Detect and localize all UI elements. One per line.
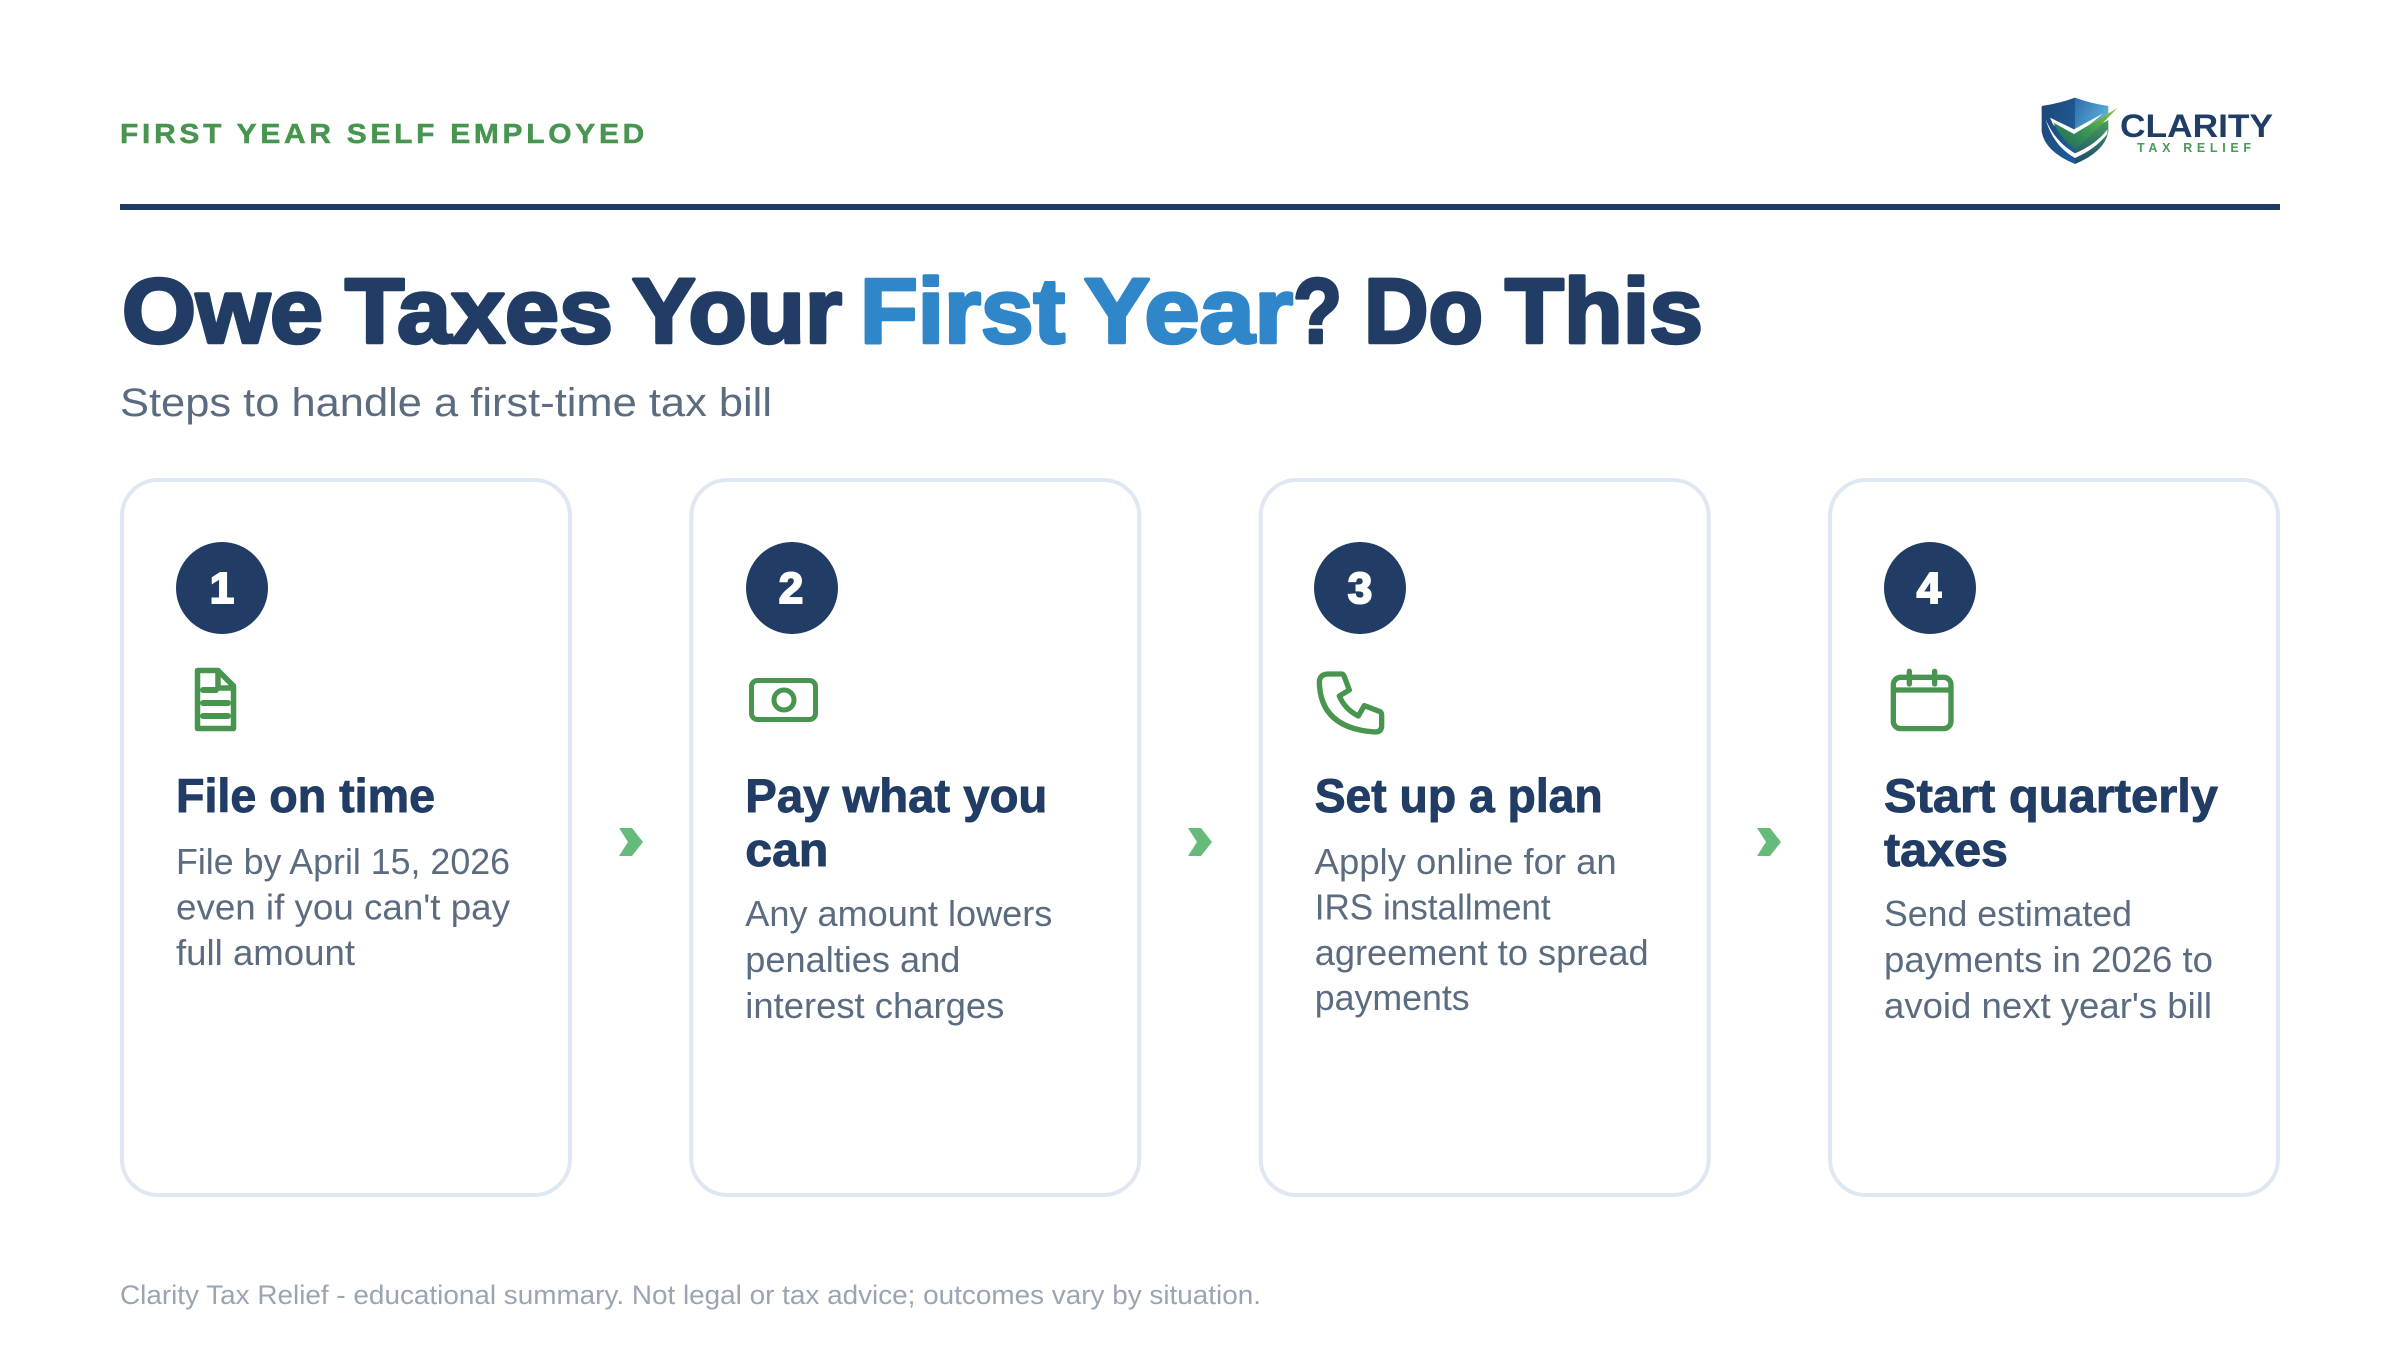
title xyxy=(122,260,1703,362)
title: Owe xyxy=(122,260,323,362)
step text: avoid next year's bill xyxy=(1884,985,2212,1026)
step heading: can xyxy=(745,823,828,876)
step text: IRS installment xyxy=(1315,886,1551,928)
step number 1: 1 xyxy=(210,564,234,613)
panel: step 4 xyxy=(1830,480,2278,1195)
step text: Send estimated xyxy=(1884,893,2132,934)
step text xyxy=(176,841,510,973)
step text: File by April 15, 2026 xyxy=(176,841,510,882)
step heading xyxy=(1884,769,2218,876)
step heading: File on time xyxy=(176,769,435,822)
step number 4 xyxy=(1884,542,1976,634)
logo: Clarity Tax Relief xyxy=(2042,98,2273,164)
step text: Apply online for an xyxy=(1315,841,1617,882)
step number 2 xyxy=(746,542,838,634)
icon: phone xyxy=(1319,674,1382,732)
step text xyxy=(745,893,1052,1026)
eyebrow label: FIRST YEAR SELF EMPLOYED xyxy=(120,118,648,149)
step number 3 xyxy=(1314,542,1406,634)
title: Taxes xyxy=(345,260,613,362)
step heading: Start quarterly xyxy=(1884,769,2218,822)
icon: banknote xyxy=(752,680,816,720)
title: Do xyxy=(1364,260,1483,362)
footer disclaimer: Clarity Tax Relief - educational summary. Not legal or tax advice; outcomes vary by situation. xyxy=(120,1280,1261,1310)
icon: shield with check xyxy=(2042,98,2117,164)
title: First xyxy=(860,260,1065,362)
header rule xyxy=(120,204,2280,210)
step text: Any amount lowers xyxy=(745,893,1052,934)
step heading: taxes xyxy=(1884,823,2008,876)
panel: step 1 xyxy=(122,480,570,1195)
step text: even if you can't pay xyxy=(176,886,510,928)
step text: interest charges xyxy=(745,985,1004,1026)
step text xyxy=(1315,841,1649,1018)
title: Year xyxy=(1084,260,1293,362)
logo tagline: TAX RELIEF xyxy=(2137,141,2251,155)
step number 2: 2 xyxy=(779,564,803,613)
step text: payments in 2026 to xyxy=(1884,939,2213,980)
subtitle: Steps to handle a first-time tax bill xyxy=(120,381,772,425)
icon: document xyxy=(198,670,234,728)
step text: full amount xyxy=(176,932,355,973)
panel: step 2 xyxy=(691,480,1139,1195)
step text xyxy=(1884,893,2213,1026)
arrow 1 xyxy=(619,828,643,856)
arrow 2 xyxy=(1188,828,1212,856)
logo wordmark: CLARITY xyxy=(2120,108,2273,144)
step heading: Pay what you xyxy=(745,769,1047,822)
step heading xyxy=(745,769,1047,876)
icon: calendar xyxy=(1893,671,1951,729)
step number 3: 3 xyxy=(1348,564,1372,613)
step text: agreement to spread xyxy=(1315,932,1649,973)
title: This xyxy=(1505,260,1703,362)
title: ? xyxy=(1293,260,1342,362)
step number 1 xyxy=(176,542,268,634)
step heading: Set up a plan xyxy=(1315,769,1603,822)
step number 4: 4 xyxy=(1917,564,1942,613)
step text: penalties and xyxy=(745,939,960,980)
step text: payments xyxy=(1315,977,1470,1018)
title: Your xyxy=(632,260,842,362)
panel: step 3 xyxy=(1261,480,1709,1195)
arrow 3 xyxy=(1757,828,1781,856)
